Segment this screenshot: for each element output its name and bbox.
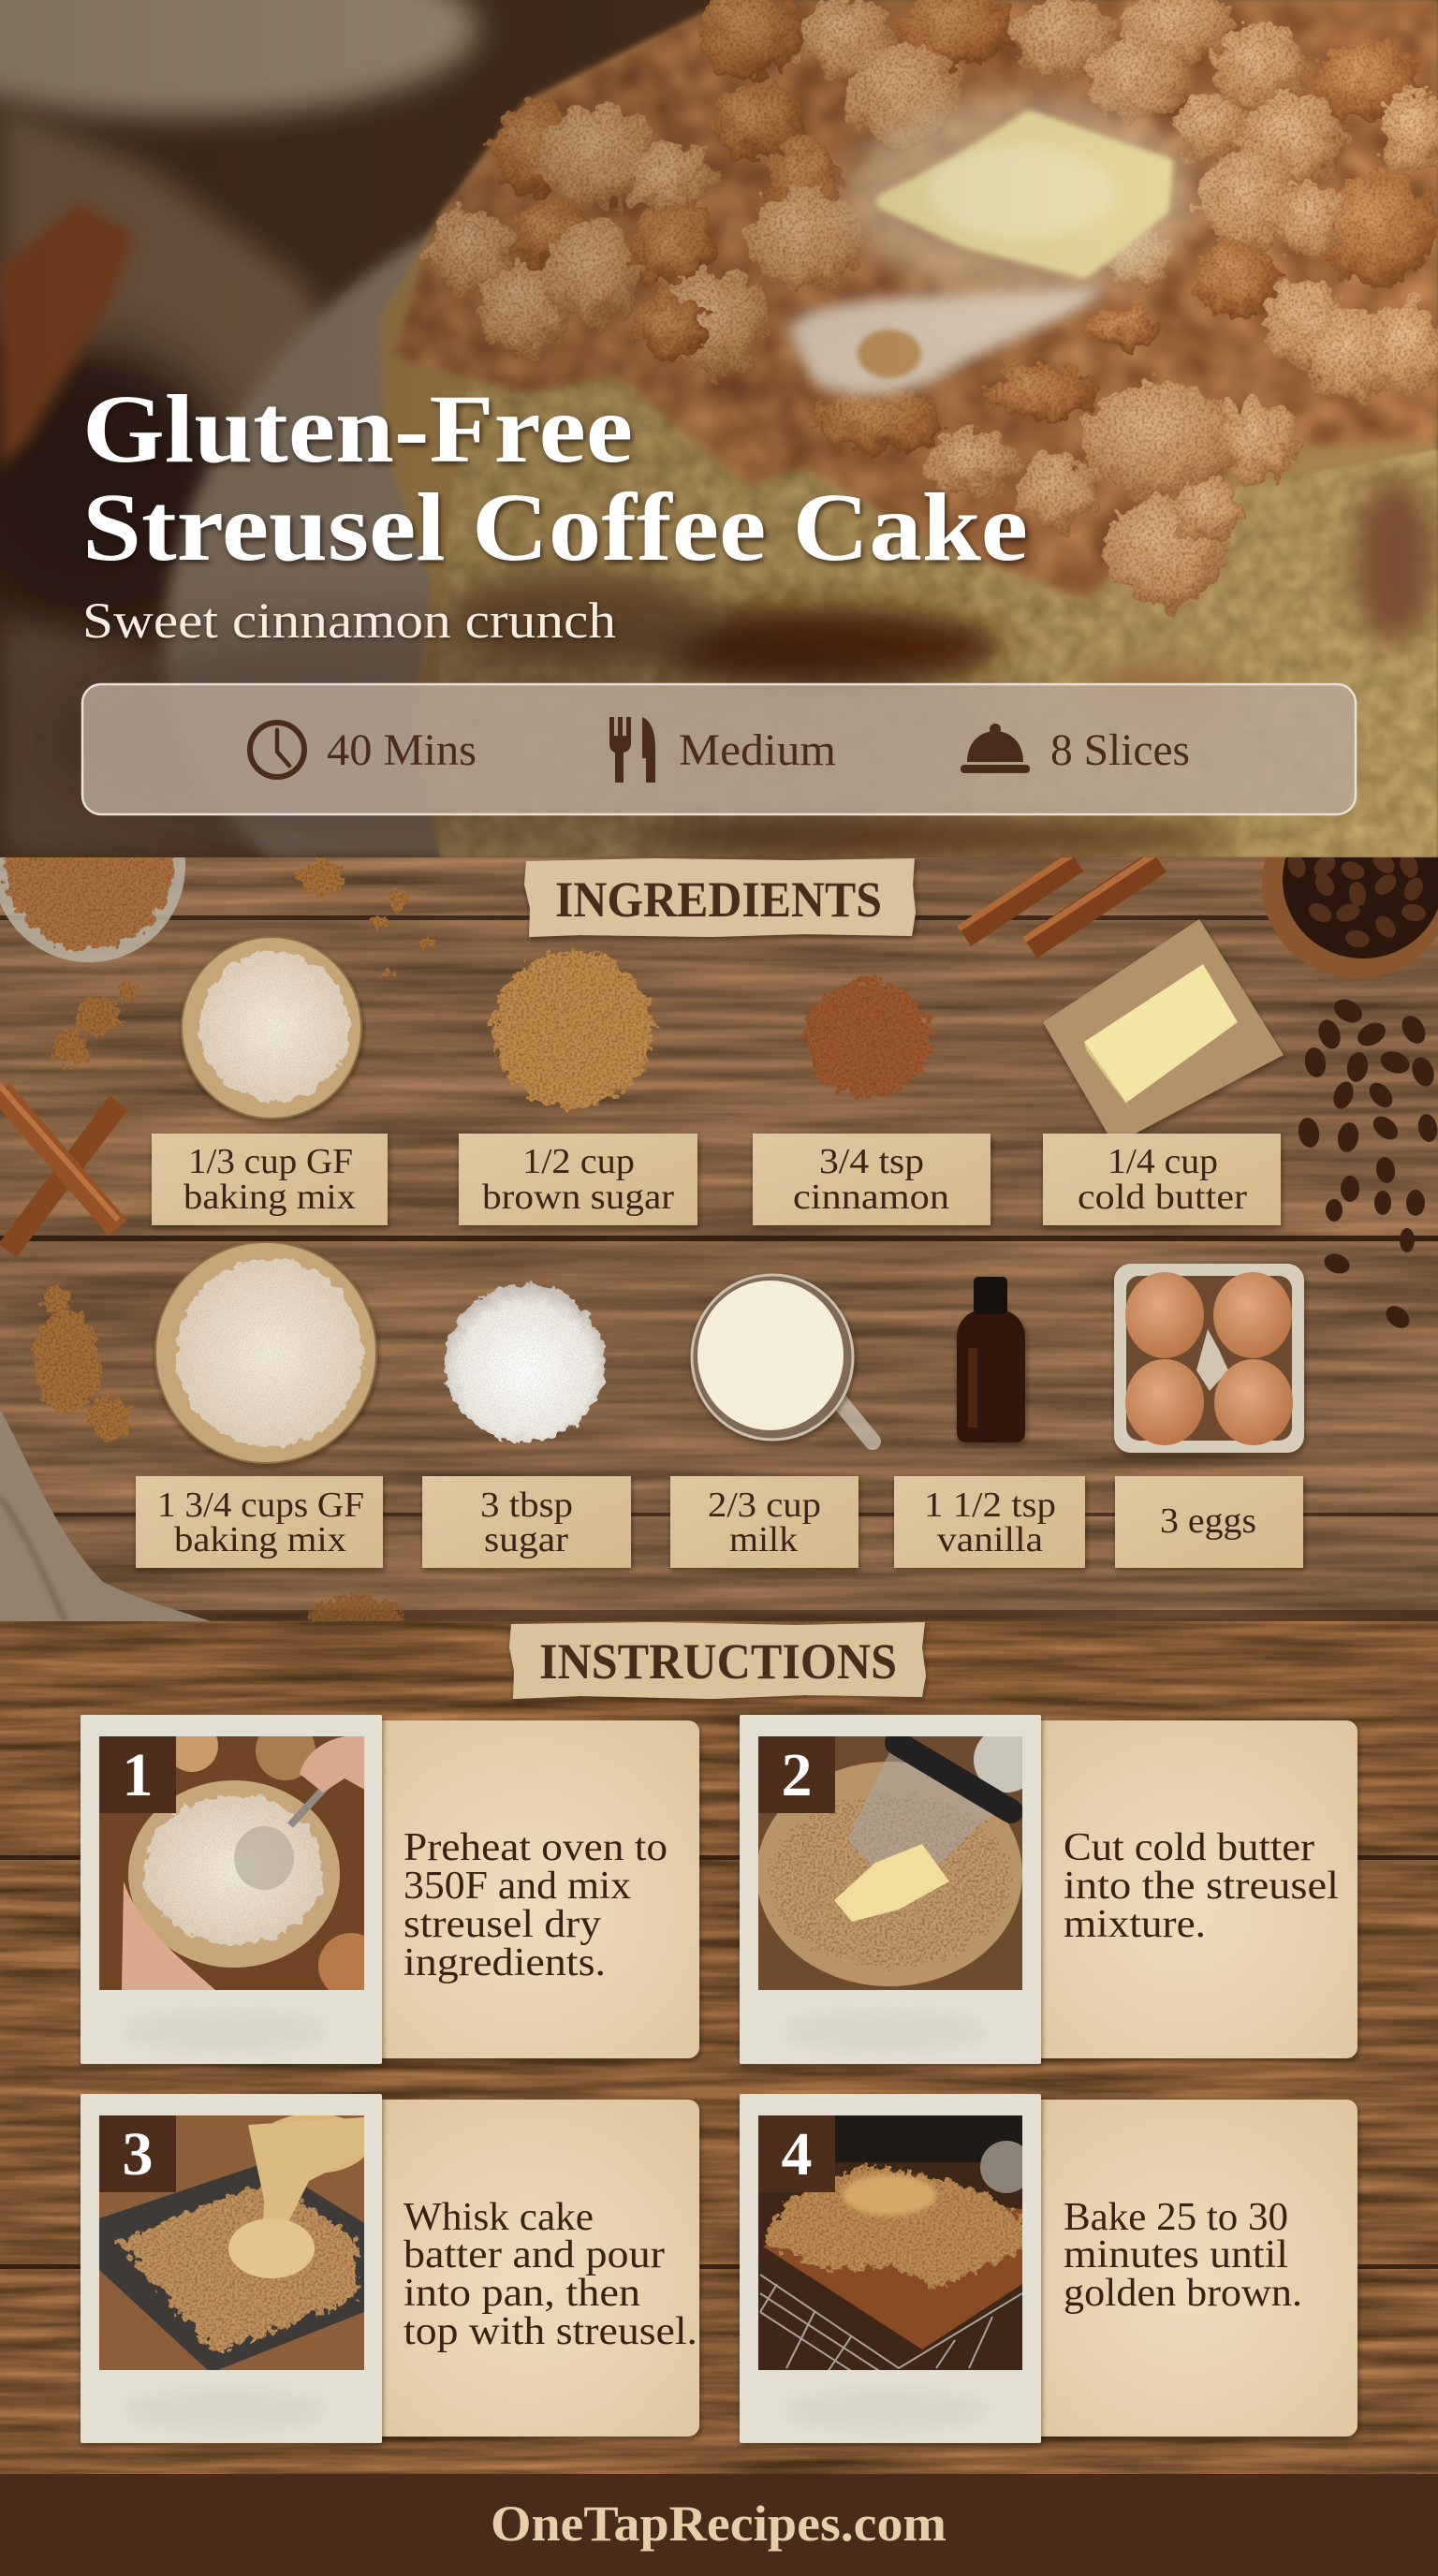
- step 4 text: golden brown.: [1064, 2272, 1302, 2315]
- step 3 text: batter and pour: [404, 2233, 665, 2276]
- lower darkening: [37, 608, 1011, 871]
- stat: servings: 8 Slices: [1050, 725, 1190, 775]
- label: 1 3/4 cups GF baking mix: [136, 1476, 383, 1568]
- step 4 text: minutes until: [1064, 2233, 1288, 2276]
- sugar pile: [445, 1284, 606, 1442]
- step 2 card: [740, 1715, 1357, 2064]
- brown sugar pile: [492, 951, 653, 1108]
- left-side darkening for title: [0, 0, 1438, 857]
- blurred background: bowl: [0, 0, 477, 117]
- label: 1 3/4 cups GF baking mix: 1 3/4 cups GF: [157, 1486, 364, 1525]
- step 3 number badge: [99, 2115, 176, 2192]
- step 3 paper panel: [356, 2100, 699, 2437]
- heading banner: ingredients: INGREDIENTS: [555, 871, 882, 928]
- step 1 photo: whisking flour in a bowl: [99, 1720, 384, 1998]
- step 2 polaroid frame: [740, 1715, 1041, 2064]
- label: 1 1/2 tsp vanilla: vanilla: [937, 1520, 1043, 1559]
- step 4 polaroid scuff: [782, 2390, 988, 2431]
- step 1 number badge: [99, 1736, 176, 1813]
- step 4 polaroid frame: [740, 2094, 1041, 2443]
- title: [82, 375, 1028, 581]
- label: 1/3 cup GF baking mix: 1/3 cup GF: [188, 1142, 353, 1181]
- label: 1/4 cup cold butter: cold butter: [1078, 1178, 1247, 1217]
- butter highlight: [927, 145, 1114, 239]
- step 4 number badge: [758, 2115, 835, 2192]
- instructions wooden background: [0, 1621, 1438, 2474]
- label: 1/2 cup brown sugar: brown sugar: [482, 1178, 674, 1217]
- title: Streusel Coffee Cake: [82, 474, 1028, 581]
- icon: serving cloche: [961, 724, 1030, 773]
- melted butter halo: [843, 94, 1198, 300]
- step 2 photo: cutting butter into streusel: [756, 1727, 1039, 1990]
- label: 1/2 cup brown sugar: [459, 1134, 697, 1225]
- label: 1/2 cup brown sugar: 1/2 cup: [522, 1142, 635, 1181]
- ingredients wooden background: [0, 769, 1438, 1632]
- footer: OneTapRecipes.com: [491, 2496, 946, 2552]
- step 1 card: [81, 1715, 699, 2064]
- blurred background: cinnamon stick: [0, 201, 136, 468]
- step 2 paper panel: [1016, 1720, 1357, 2058]
- step 1 text: Preheat oven to: [404, 1826, 668, 1869]
- heading banner: instructions: [509, 1622, 926, 1699]
- heading banner: ingredients: [524, 858, 916, 937]
- icon: fork and knife: [609, 717, 655, 783]
- cinnamon sticks, left: [0, 1084, 119, 1251]
- melted butter streak: [786, 285, 1105, 395]
- label: 3 eggs: 3 eggs: [1160, 1501, 1256, 1541]
- streusel top base: [393, 0, 1438, 599]
- step 3 text: Whisk cake: [404, 2196, 594, 2239]
- hero photo: streusel coffee cake: [0, 0, 1438, 871]
- label: 3 tbsp sugar: [422, 1476, 631, 1568]
- blurred background: lower burlap: [0, 613, 267, 857]
- step 1 number badge: 1: [122, 1741, 154, 1809]
- butter on parchment: [1043, 919, 1284, 1145]
- label: 1/3 cup GF baking mix: [152, 1134, 388, 1225]
- step 1 polaroid scuff: [122, 2011, 328, 2052]
- large bowl of baking mix: [155, 1242, 376, 1463]
- step 2 polaroid scuff: [782, 2011, 988, 2052]
- label: 2/3 cup milk: milk: [729, 1520, 798, 1559]
- step 4 photo: baked loaf on cooling rack: [758, 2115, 1033, 2378]
- coffee bean bowl: [1262, 791, 1438, 978]
- measuring cup of milk: [692, 1275, 873, 1442]
- step 4 paper panel: [1016, 2100, 1357, 2437]
- label: 2/3 cup milk: [670, 1476, 858, 1568]
- step 1 text: [404, 1826, 668, 1984]
- step 2 text: into the streusel: [1064, 1865, 1339, 1908]
- cake body: [379, 0, 1438, 857]
- butter pat: [885, 119, 1165, 270]
- label: 1/4 cup cold butter: [1043, 1134, 1281, 1225]
- icon: clock: [250, 723, 304, 777]
- label: 3/4 tsp cinnamon: [753, 1134, 990, 1225]
- scattered sugar, bottom: [307, 1598, 404, 1632]
- egg carton: [1114, 1264, 1304, 1453]
- step 2 text: mixture.: [1064, 1903, 1206, 1946]
- cinnamon pile: [804, 981, 932, 1097]
- step 2 text: Cut cold butter: [1064, 1826, 1314, 1869]
- label: 3/4 tsp cinnamon: 3/4 tsp: [819, 1142, 924, 1181]
- cinnamon swirl: [449, 477, 1437, 860]
- scattered brown sugar, lower left: [34, 1288, 131, 1441]
- step 1 polaroid frame: [81, 1715, 382, 2064]
- label: 1/3 cup GF baking mix: baking mix: [183, 1178, 356, 1217]
- label: 1 1/2 tsp vanilla: 1 1/2 tsp: [924, 1486, 1056, 1525]
- title: Gluten-Free: [82, 375, 633, 483]
- vanilla bottle: [957, 1277, 1025, 1442]
- step 4 text: Bake 25 to 30: [1064, 2196, 1288, 2239]
- label: 1 3/4 cups GF baking mix: baking mix: [174, 1520, 346, 1559]
- step 3 text: top with streusel.: [404, 2310, 697, 2353]
- blurred background: burlap cloth: [0, 110, 326, 444]
- subtitle: Sweet cinnamon crunch: [82, 593, 616, 649]
- step 4 card: [740, 2094, 1357, 2443]
- step 3 text: into pan, then: [404, 2272, 640, 2315]
- scattered brown sugar crumbs, top: [298, 859, 432, 979]
- step 4 text: [1064, 2196, 1302, 2315]
- step 3 polaroid frame: [81, 2094, 382, 2443]
- stats bar: [82, 684, 1356, 814]
- label: 2/3 cup milk: 2/3 cup: [708, 1486, 821, 1525]
- label: 3 tbsp sugar: 3 tbsp: [480, 1486, 573, 1525]
- blurred background: dark table shadow: [0, 346, 234, 627]
- plate: [156, 227, 442, 857]
- step 3 number badge: 3: [122, 2120, 154, 2188]
- jar of cinnamon sugar: [0, 769, 185, 962]
- stat: difficulty: Medium: [679, 725, 836, 775]
- footer: [0, 2474, 1438, 2576]
- label: 3 tbsp sugar: sugar: [484, 1520, 568, 1559]
- label: 1 1/2 tsp vanilla: [894, 1476, 1085, 1568]
- step 2 number badge: 2: [781, 1741, 813, 1809]
- step 3 card: [81, 2094, 699, 2443]
- stat: time: 40 Mins: [327, 725, 477, 775]
- step 1 paper panel: [356, 1720, 699, 2058]
- step 1 text: ingredients.: [404, 1941, 606, 1984]
- step 3 polaroid scuff: [122, 2390, 328, 2431]
- label: 3 eggs: [1115, 1476, 1303, 1568]
- step 1 text: 350F and mix: [404, 1865, 631, 1908]
- step 2 number badge: [758, 1736, 835, 1813]
- step 3 photo: pouring batter over streusel: [99, 2114, 370, 2373]
- label: 3/4 tsp cinnamon: cinnamon: [793, 1178, 949, 1217]
- step 3 text: [404, 2196, 697, 2353]
- cake crumb face: [440, 374, 1438, 857]
- cinnamon sticks, top: [959, 854, 1159, 947]
- bowl of streusel baking mix: [182, 937, 361, 1119]
- scattered brown sugar crumbs, left: [53, 983, 136, 1067]
- step 4 number badge: 4: [781, 2120, 813, 2188]
- crumb on melted butter: [858, 329, 921, 378]
- linen cloth: [0, 1409, 211, 1621]
- step 2 text: [1064, 1826, 1339, 1946]
- label: 1/4 cup cold butter: 1/4 cup: [1108, 1142, 1218, 1181]
- coffee beans scattered: [1296, 994, 1438, 1333]
- heading banner: instructions: INSTRUCTIONS: [539, 1633, 897, 1690]
- streusel crumbs: [431, 0, 1438, 608]
- step 1 text: streusel dry: [404, 1903, 601, 1946]
